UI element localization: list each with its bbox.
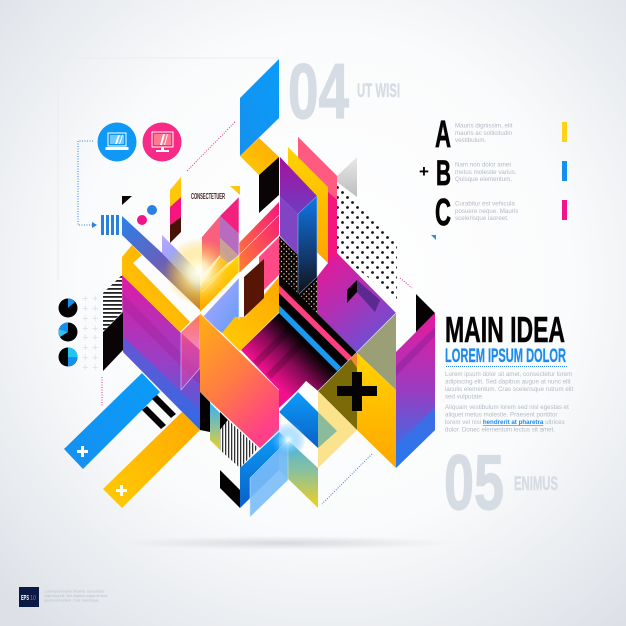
list: A: Mauris dignissim, elit <box>455 122 513 130</box>
icon: black corner triangle <box>122 196 132 205</box>
list: C: posuere neque. Mauris <box>455 208 518 215</box>
olive panel <box>357 313 396 390</box>
plus grid: + <box>82 293 88 305</box>
small brown block <box>170 217 181 243</box>
list: A: A <box>435 114 451 156</box>
body text: iaculis elementum. Cras scelerisque rutrum elit <box>445 386 574 393</box>
pie 3 <box>58 348 78 366</box>
right purple panel <box>396 313 435 468</box>
heading: ut wisi: UT WISI <box>357 81 400 102</box>
white band <box>279 412 318 468</box>
yellow diamond under blue <box>240 138 279 175</box>
white notch <box>239 257 259 290</box>
icon: big black plus <box>337 372 377 411</box>
pink dot <box>137 215 147 225</box>
body text: lorem vel nisi hendrerit at pharetra ultrices <box>445 419 565 426</box>
plus grid: + <box>92 362 98 374</box>
icon: vertical bars <box>101 215 119 235</box>
body text: sed vulputate. <box>445 394 484 400</box>
arrow: dotted connector <box>78 141 97 228</box>
pink orange wide band <box>239 202 279 273</box>
list: C: Curabitur est vehicula <box>455 200 515 208</box>
color bar blue <box>562 161 567 181</box>
blue dot <box>147 205 157 215</box>
brown parallelogram <box>244 259 264 317</box>
dotted line: pink right <box>400 278 412 288</box>
yellow lower band <box>222 277 279 351</box>
floor shadow <box>115 536 455 550</box>
icon: monitor circle <box>142 122 182 162</box>
plus grid: + <box>92 342 98 354</box>
grey triangle <box>337 157 357 197</box>
footer text: adipiscing elit. Sed dapibus augue at nunc <box>44 594 108 598</box>
heading: 04: 04 <box>288 47 349 135</box>
label: consectetuer: CONSECTETUER <box>191 192 225 201</box>
pink diagonal band <box>279 285 352 361</box>
yellow bar <box>103 412 200 508</box>
plus grid: + <box>82 332 88 344</box>
pie 2 <box>58 322 78 342</box>
black centre block <box>279 275 357 391</box>
orange overlay panel <box>181 314 200 390</box>
body text: aliquet metus molestie. Praesent porttitor <box>445 412 557 418</box>
list: B: B <box>436 154 451 193</box>
vertical stripes panel <box>220 420 258 468</box>
dotted line: pink left <box>101 377 103 407</box>
magenta shaded block <box>241 313 338 408</box>
heading: enimus: ENIMUS <box>514 474 558 495</box>
black small triangle <box>220 412 228 430</box>
list: A: mauris ac sollicitudin <box>455 130 513 137</box>
black block bottom <box>200 392 210 432</box>
color bar yellow <box>562 122 567 142</box>
grey face <box>220 238 239 263</box>
body text: Lorem ipsum dolor sit amet, consectetur lorem <box>445 371 572 378</box>
light blue face <box>250 440 288 517</box>
dotted line: blue bottom <box>322 454 372 504</box>
footer badge <box>19 587 39 607</box>
list: B: metus molestie varius. <box>455 169 517 176</box>
footer badge: EPS <box>21 593 29 602</box>
horizontal stripes panel <box>103 275 122 332</box>
plus grid: + <box>82 313 88 325</box>
black triangle left <box>103 312 123 371</box>
small pink block <box>170 197 181 225</box>
glow: centre flare <box>165 238 233 306</box>
dotted divider <box>446 366 568 368</box>
small blue triangle <box>431 235 436 240</box>
geometric artwork <box>64 59 435 517</box>
list: B <box>419 154 517 193</box>
plus grid: + <box>92 352 98 364</box>
blue to brown band <box>122 216 200 310</box>
pink lower block <box>259 237 279 295</box>
white highlight lines <box>200 197 279 390</box>
small yellow block <box>170 177 181 207</box>
black bottom block <box>220 470 240 508</box>
thin frame line <box>58 58 279 280</box>
glow: blue flare <box>270 422 306 458</box>
dark olive panel <box>318 353 357 430</box>
left purple panel <box>122 275 200 430</box>
dark dotted panels <box>279 236 298 295</box>
large magenta purple panel <box>317 253 396 353</box>
black stripes <box>142 406 166 429</box>
panel: top blue parallelogram <box>240 59 279 156</box>
blue bottom face <box>240 432 279 508</box>
list: A: vestibulum. <box>455 137 487 144</box>
black triangle right <box>416 294 435 332</box>
shading stripes <box>253 326 306 379</box>
list: B: Quisque elementum. <box>455 176 512 183</box>
pale yellow chevron <box>318 391 357 468</box>
dotted line: pink top <box>186 122 235 172</box>
centre yellow <box>200 255 239 312</box>
plus grid: + <box>92 332 98 344</box>
bottom teal yellow panel <box>279 432 318 508</box>
plus grid: + <box>92 313 98 325</box>
pink stripe back <box>298 137 337 272</box>
dotted panel <box>337 182 397 300</box>
footer text: Lorem ipsum dolor sit amet, consectetur <box>44 590 105 594</box>
plus grid: + <box>82 323 88 335</box>
list: C: scelerisque laoreet. <box>455 215 509 222</box>
list: B: + <box>419 162 429 181</box>
orange accent <box>350 353 357 368</box>
white gap <box>298 381 318 412</box>
translucent purple face <box>220 216 239 256</box>
blue diagonal band <box>279 305 341 371</box>
list: C: C <box>435 192 451 234</box>
yellow panel <box>357 353 396 468</box>
pink triangle <box>220 197 239 234</box>
color bar pink <box>562 200 567 220</box>
plus grid: + <box>82 352 88 364</box>
footer badge: 10 <box>30 593 36 602</box>
yellow corner triangle <box>230 186 240 195</box>
icon: laptop circle <box>98 122 136 162</box>
teal yellow strip <box>210 403 220 450</box>
list: C <box>435 192 518 234</box>
blue diamond <box>279 392 318 448</box>
yellow chevron band <box>122 245 190 332</box>
black bar <box>259 157 279 213</box>
purple top face <box>280 157 317 214</box>
blue column <box>298 196 317 295</box>
yellow stripe back <box>288 147 328 263</box>
plus grid: + <box>92 323 98 335</box>
pie charts <box>58 298 78 366</box>
plus grid: + <box>82 303 88 315</box>
teal triangle <box>318 412 337 448</box>
icon: plus on yellow bar <box>116 485 127 496</box>
list: B: Nam non dolor amet <box>455 162 511 168</box>
orange pink parallelogram <box>200 313 279 448</box>
blue bar <box>64 373 160 469</box>
heading: 05: 05 <box>444 438 504 526</box>
body text: Aliquam vestibulum lorem sed nisl egestas et <box>445 404 569 411</box>
periwinkle band <box>162 235 200 292</box>
list: A <box>435 114 513 156</box>
plus grid: + <box>82 362 88 374</box>
pie 1 <box>58 298 78 318</box>
body text: adipiscing elit. Sed dapibus augue at nunc elit <box>445 378 571 386</box>
footer text: iaculis elementum. Cras scelerisque. <box>44 598 99 602</box>
periwinkle face <box>202 278 239 333</box>
plus grid: + <box>92 293 98 305</box>
body text: dolor. Donec elementum lectus sit amet. <box>445 426 555 434</box>
upper yellow wedge <box>200 257 228 290</box>
plus grid: + <box>82 342 88 354</box>
highlight line <box>318 313 396 391</box>
small black fold <box>347 280 357 303</box>
icon: plus on blue bar <box>77 446 88 457</box>
purple side face <box>280 197 298 255</box>
plus grid: + <box>92 303 98 315</box>
pink orange face <box>202 216 220 275</box>
